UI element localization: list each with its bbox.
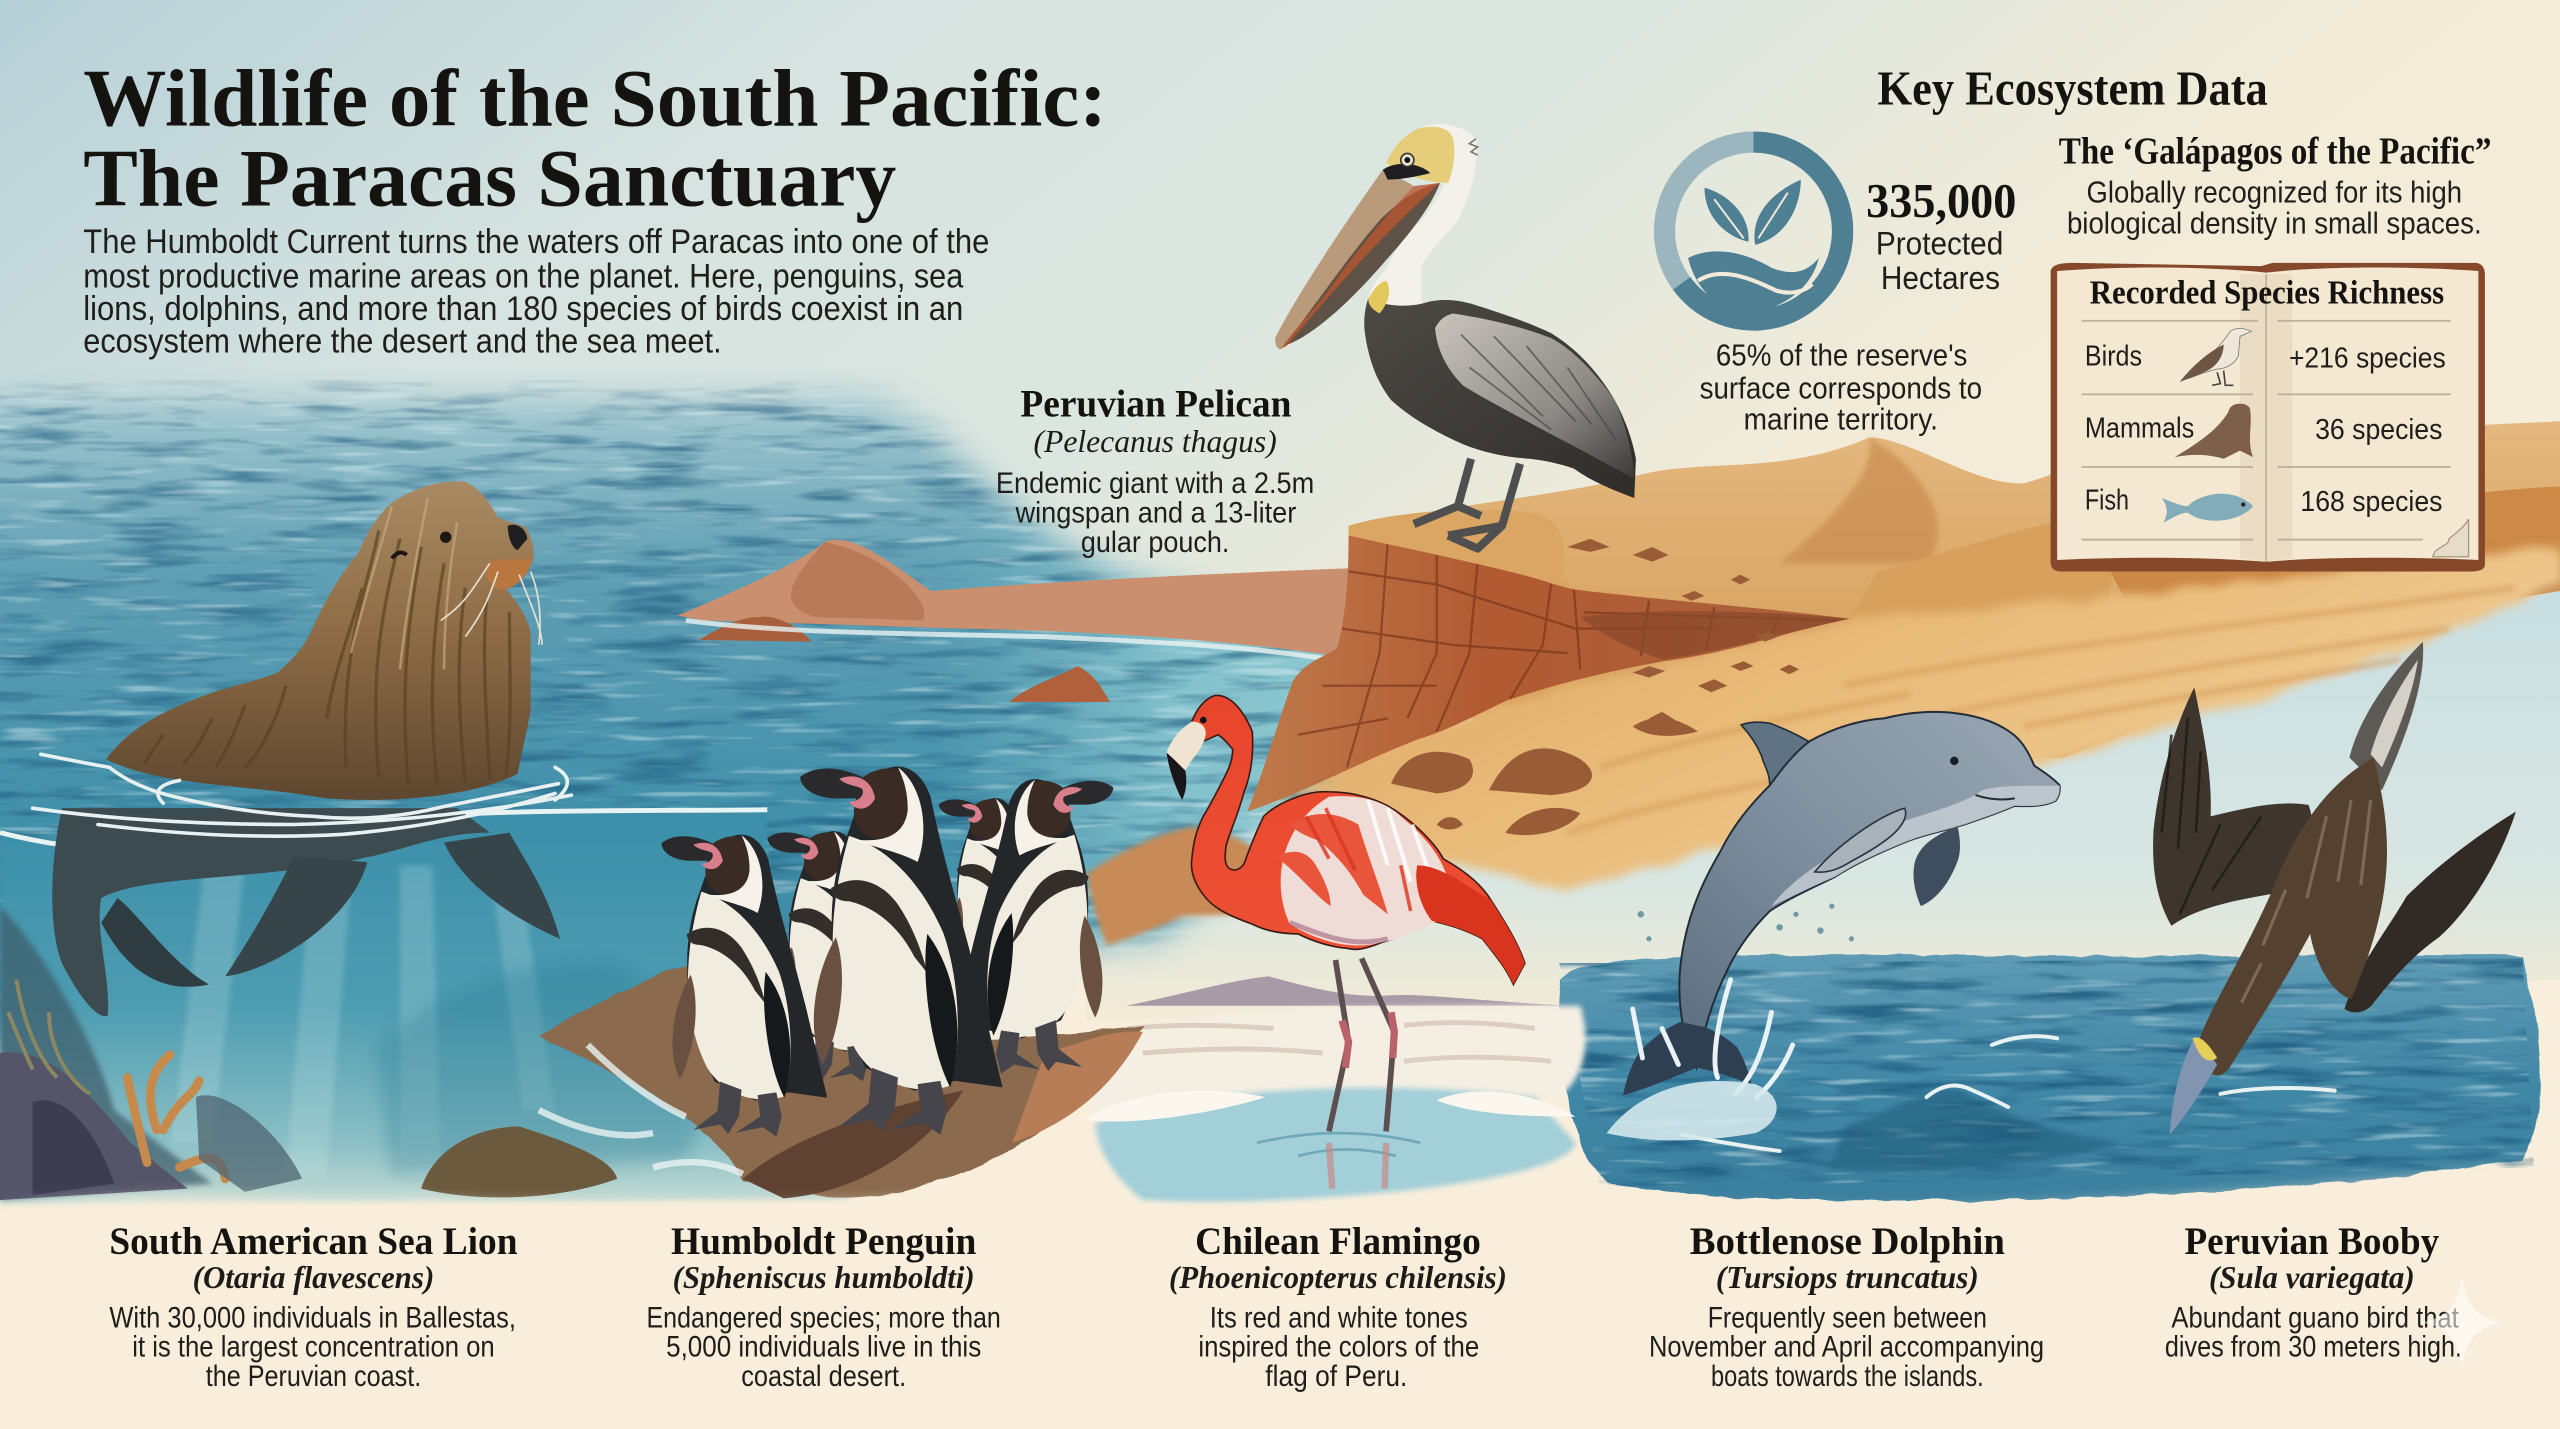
icon: bird: [2180, 328, 2251, 385]
species: sea lion text: it is the largest concentration on: [132, 1331, 495, 1364]
icon: leaf and waves: [1688, 180, 1819, 313]
species: peruvian pelican text: [996, 382, 1314, 559]
species: dolphin text: (Tursiops truncatus): [1716, 1260, 1979, 1295]
species: penguin text: Endangered species; more than: [647, 1301, 1001, 1334]
book rows: [2085, 341, 2446, 518]
cream fade at bottom of illustration: [0, 1167, 2560, 1290]
panel: species richness book: [2051, 263, 2485, 571]
book rows: 168 species: [2300, 486, 2442, 518]
species: penguin text: 5,000 individuals live in this: [666, 1331, 981, 1364]
species: dolphin text: [1649, 1220, 2044, 1393]
species: peruvian pelican text: Endemic giant with a 2.5m: [996, 467, 1314, 500]
stat: protected hectares: 335,000: [1866, 173, 2016, 228]
background: far hills, salt flat and lagoon: [1045, 976, 1585, 1202]
species: penguin text: (Spheniscus humboldti): [673, 1260, 975, 1295]
species: flamingo text: flag of Peru.: [1265, 1360, 1407, 1393]
title: Wildlife of the South Pacific:: [83, 53, 1107, 144]
species: sea lion text: With 30,000 individuals in Ballestas,: [109, 1301, 516, 1334]
species: sea lion text: South American Sea Lion: [109, 1220, 518, 1263]
background: foreground sand slope: [1257, 547, 2560, 891]
species: penguin text: [647, 1220, 1001, 1393]
illustration: sea lion: [33, 481, 571, 1016]
icon: sea lion: [2175, 404, 2253, 459]
background: distant headland: [678, 540, 1355, 702]
species: flamingo text: inspired the colors of the: [1198, 1331, 1479, 1364]
background: sky above right sea and behind flamingo: [1086, 539, 2560, 1020]
species: dolphin text: Frequently seen between: [1708, 1301, 1987, 1334]
species: booby text: Peruvian Booby: [2184, 1220, 2440, 1263]
species: penguin text: coastal desert.: [741, 1360, 906, 1393]
stat: protected hectares: Hectares: [1881, 259, 2000, 296]
species: flamingo text: Chilean Flamingo: [1195, 1220, 1481, 1263]
callout: galapagos of the pacific: [2059, 131, 2491, 240]
title: [83, 53, 1107, 224]
species: sea lion text: [109, 1220, 518, 1393]
species: peruvian pelican text: (Pelecanus thagus): [1033, 424, 1277, 459]
species: booby text: (Sula variegata): [2209, 1260, 2415, 1295]
illustration: peruvian pelican: [1275, 124, 1636, 549]
illustration: sand rocks: [1391, 539, 1799, 835]
illustration: flamingo: [1167, 695, 1525, 1189]
icon: fish: [2162, 494, 2253, 522]
stat: protected hectares: [1866, 173, 2016, 296]
species: flamingo text: Its red and white tones: [1210, 1301, 1468, 1334]
stat: protected hectares: Protected: [1876, 225, 2003, 262]
species: peruvian pelican text: Peruvian Pelican: [1020, 382, 1292, 425]
illustration: penguin group: [661, 767, 1113, 1137]
species: dolphin text: November and April accompanying: [1649, 1331, 2044, 1364]
background: desert dunes: [1349, 421, 2560, 767]
species: dolphin text: Bottlenose Dolphin: [1690, 1220, 2005, 1263]
background: underwater zone: [0, 808, 849, 1205]
marine territory note: 65% of the reserve's: [1716, 340, 1967, 373]
species: dolphin text: boats towards the islands.: [1711, 1360, 1984, 1393]
illustration: dolphin: [1607, 712, 2060, 1140]
marine territory note: [1700, 340, 1982, 436]
intro paragraph: ecosystem where the desert and the sea meet.: [83, 323, 722, 361]
marine territory note: marine territory.: [1744, 403, 1938, 436]
book heading: Recorded Species Richness: [2090, 274, 2444, 312]
species: booby text: Abundant guano bird that: [2171, 1301, 2459, 1334]
callout: galapagos of the pacific: biological density in small spaces.: [2067, 207, 2482, 240]
intro paragraph: most productive marine areas on the planet. Here, penguins, sea: [83, 257, 964, 295]
title: The Paracas Sanctuary: [83, 133, 897, 224]
book rows: Fish: [2085, 484, 2129, 516]
species: booby text: [2165, 1220, 2462, 1364]
illustration: coastal slope behind flamingo: [1087, 827, 1257, 945]
book rows: Mammals: [2085, 413, 2194, 445]
heading: key ecosystem data: Key Ecosystem Data: [1878, 60, 2268, 115]
book rows: +216 species: [2289, 342, 2446, 374]
illustration: peruvian booby: [2153, 642, 2516, 1135]
species: peruvian pelican text: gular pouch.: [1081, 526, 1229, 559]
intro paragraph: lions, dolphins, and more than 180 species of birds coexist in an: [83, 290, 963, 328]
background: sand ripples: [1567, 588, 2514, 833]
species: peruvian pelican text: wingspan and a 13-liter: [1015, 496, 1297, 529]
species: flamingo text: (Phoenicopterus chilensis): [1169, 1260, 1507, 1295]
callout: galapagos of the pacific: The ‘Galápagos of the Pacific”: [2059, 131, 2491, 172]
donut chart: 65% marine: [1664, 142, 1843, 320]
species: booby text: dives from 30 meters high.: [2165, 1331, 2462, 1364]
page curl: [2433, 519, 2469, 557]
intro paragraph: The Humboldt Current turns the waters off Paracas into one of the: [83, 223, 989, 261]
species: penguin text: Humboldt Penguin: [671, 1220, 977, 1263]
background: left ocean surface: [0, 367, 1404, 1053]
species: sea lion text: the Peruvian coast.: [206, 1360, 421, 1393]
illustration: reef and coral: [0, 906, 617, 1200]
marine territory note: surface corresponds to: [1700, 372, 1982, 405]
callout: galapagos of the pacific: Globally recognized for its high: [2087, 176, 2462, 209]
book rows: Birds: [2085, 341, 2142, 373]
illustration: terracotta cliff: [1247, 510, 1850, 811]
intro paragraph: [83, 223, 989, 361]
background: right ocean: [1551, 955, 2560, 1201]
book rows: 36 species: [2315, 414, 2442, 446]
species: sea lion text: (Otaria flavescens): [193, 1260, 434, 1295]
illustration: penguin rock: [539, 963, 1143, 1198]
sparkle: [2423, 1277, 2501, 1368]
species: flamingo text: [1169, 1220, 1507, 1393]
